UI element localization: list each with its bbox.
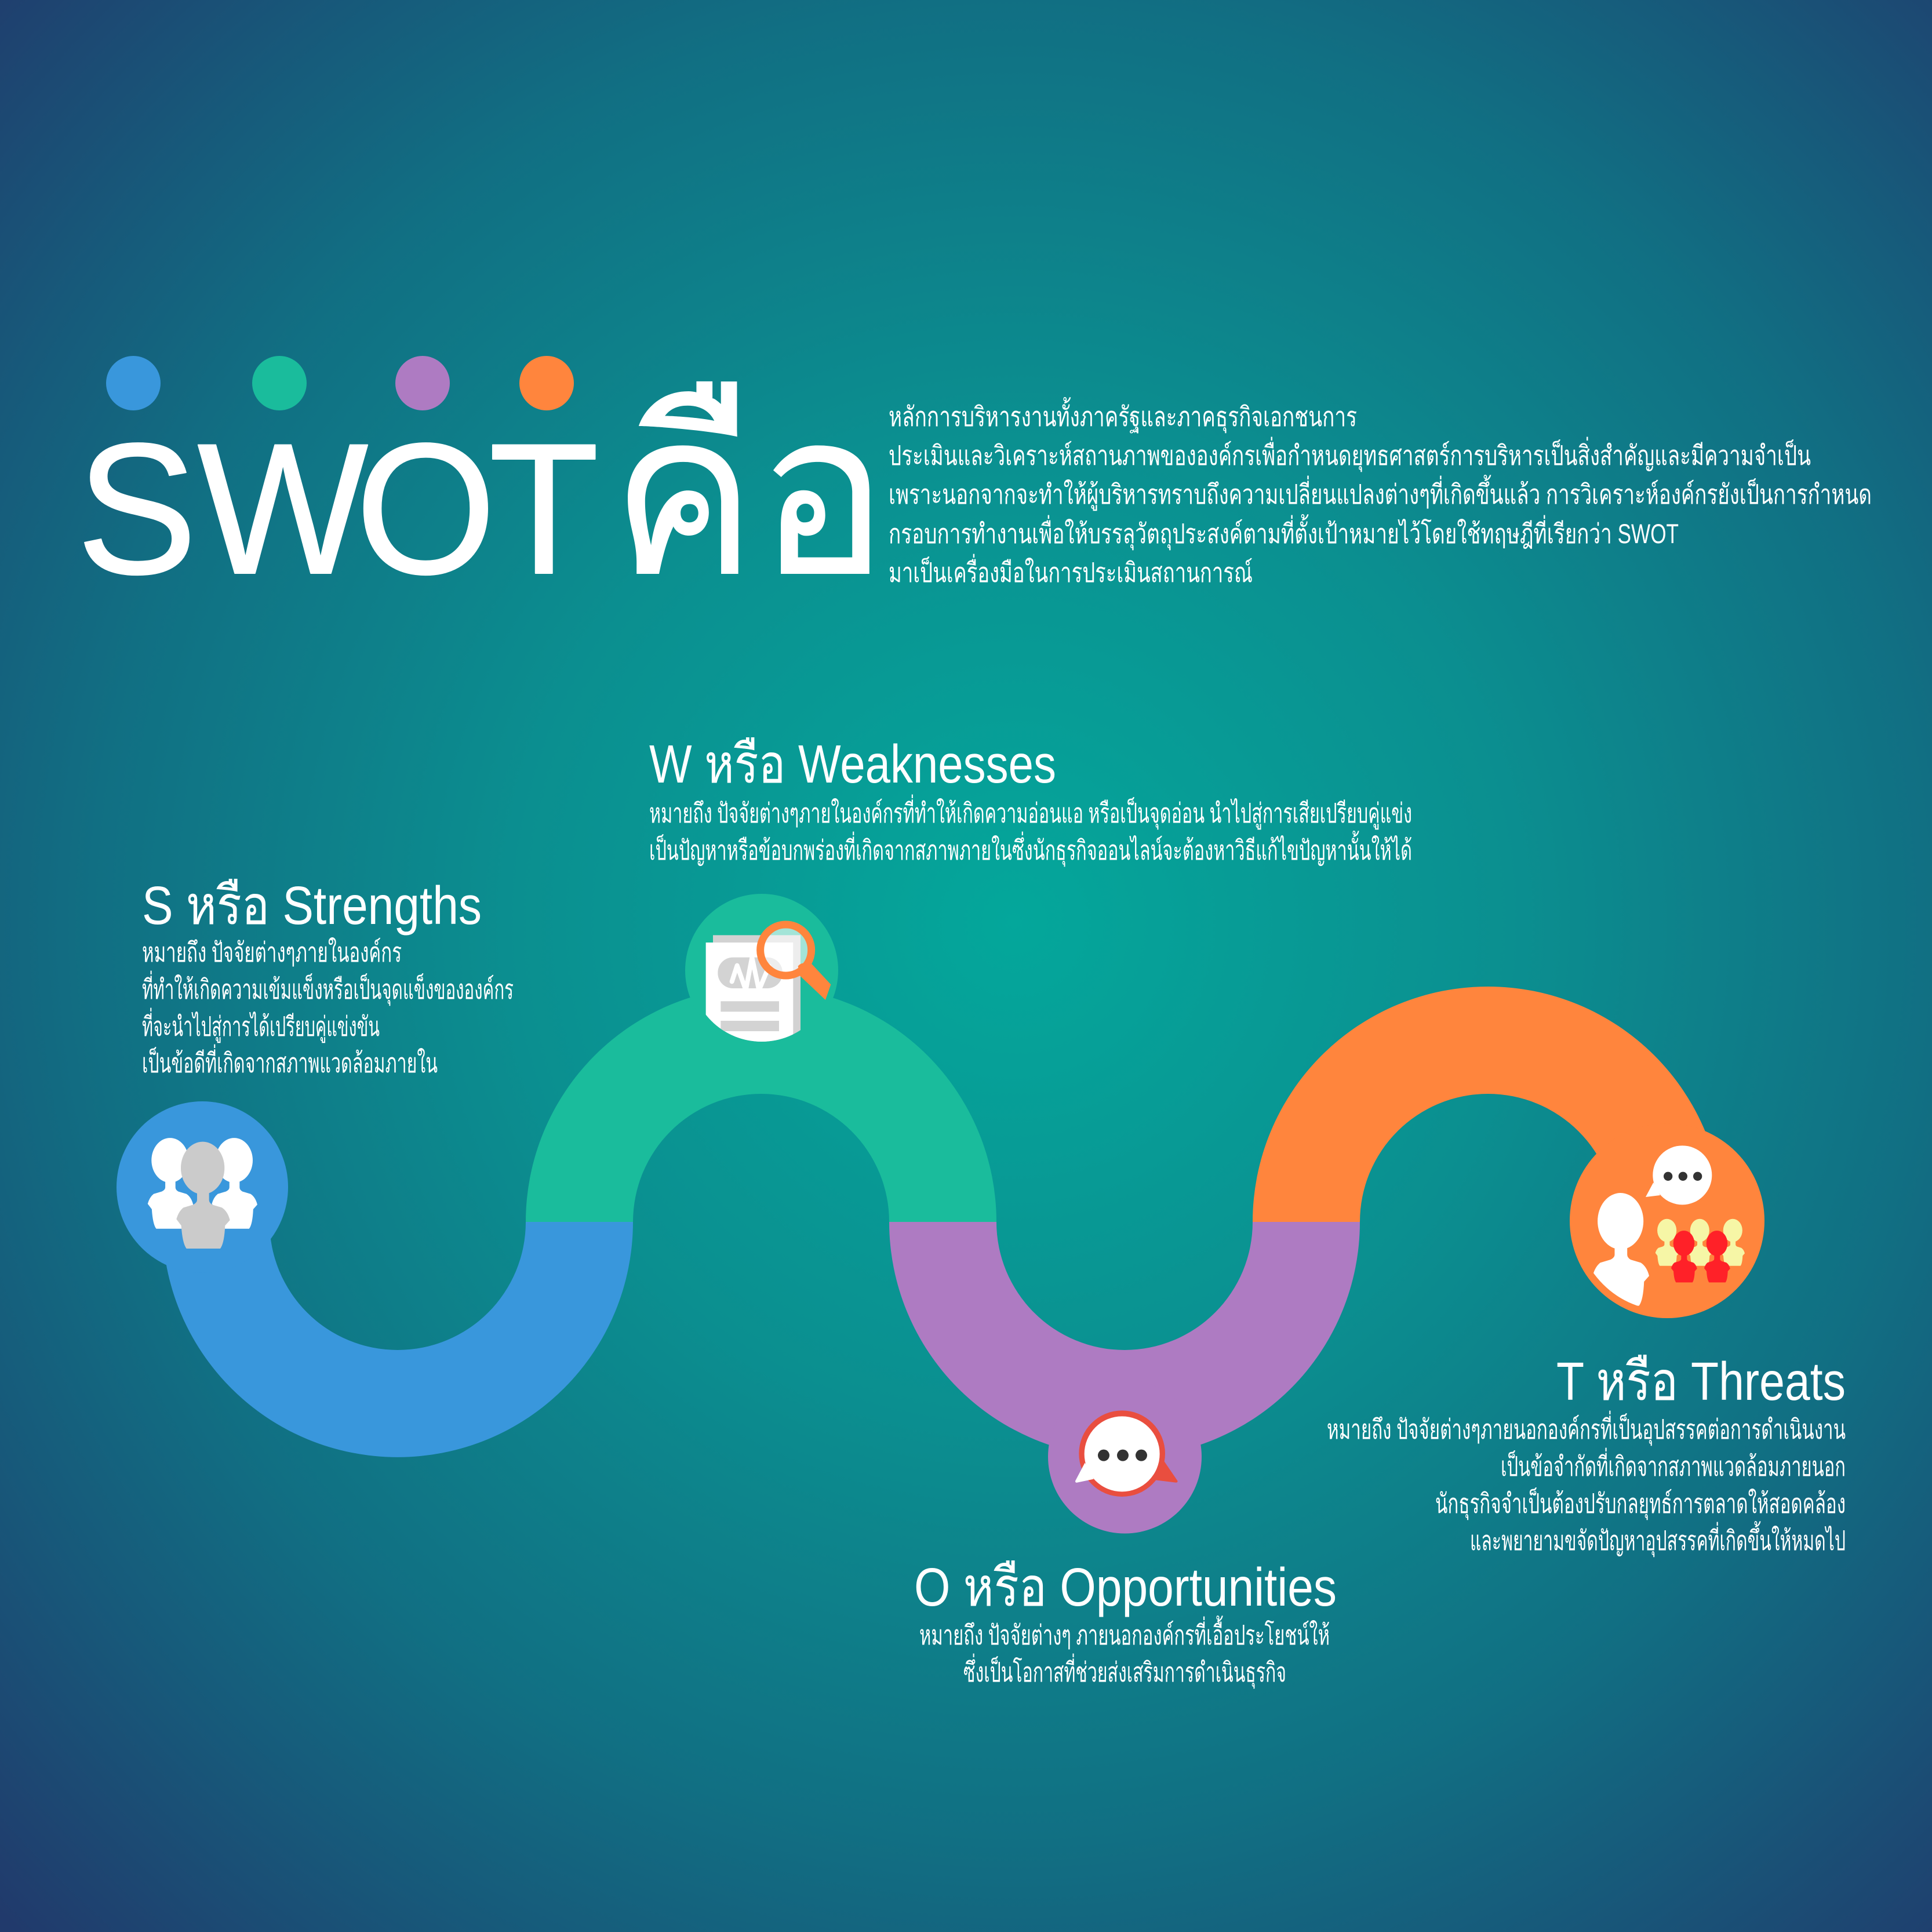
intro text bbox=[889, 397, 1872, 588]
title: SWOT bbox=[77, 405, 599, 613]
text: strengths: เป็นข้อดีที่เกิดจากสภาพแวดล้อมภายใน bbox=[142, 1044, 438, 1078]
text: opportunities: ซึ่งเป็นโอกาสที่ช่วยส่งเสริมการดำเนินธุรกิจ bbox=[963, 1653, 1286, 1689]
icon: threats circle with person, crowd and bubble bbox=[1570, 1123, 1764, 1318]
wave: green arc bbox=[526, 987, 996, 1222]
text: strengths: ที่ทำให้เกิดความเข้มแข็งหรือเป็นจุดแข็งขององค์กร bbox=[142, 970, 514, 1006]
text: opportunities bbox=[919, 1616, 1330, 1689]
heading: strengths: S หรือ Strengths bbox=[142, 875, 482, 936]
wave: purple arc bbox=[889, 1222, 1360, 1457]
wave: blue arc bbox=[162, 1222, 633, 1457]
intro text: กรอบการทำงานเพื่อให้บรรลุวัตถุประสงค์ตามที่ตั้งเป้าหมายไว้โดยใช้ทฤษฎีที่เรียกว่า SWOT bbox=[889, 514, 1679, 551]
text: opportunities: หมายถึง ปัจจัยต่างๆ ภายนอกองค์กรที่เอื้อประโยชน์ให้ bbox=[919, 1616, 1330, 1650]
text: weaknesses: หมายถึง ปัจจัยต่างๆภายในองค์กรที่ทำให้เกิดความอ่อนแอ หรือเป็นจุดอ่อน นำไปสู่การเสียเปรียบคู่แข่ง bbox=[649, 794, 1412, 830]
icon: opportunities circle with speech bubble bbox=[1048, 1380, 1202, 1534]
text: threats bbox=[1327, 1410, 1846, 1558]
icon: strengths circle with people bbox=[117, 1101, 288, 1273]
title bbox=[77, 366, 889, 623]
text: strengths: ที่จะนำไปสู่การได้เปรียบคู่แข่งขัน bbox=[142, 1007, 380, 1043]
title dots bbox=[106, 356, 574, 410]
wave: orange arc bbox=[1253, 987, 1723, 1222]
heading: threats: T หรือ Threats bbox=[1556, 1351, 1846, 1411]
text: weaknesses: เป็นปัญหาหรือข้อบกพร่องที่เกิดจากสภาพภายในซึ่งนักธุรกิจออนไลน์จะต้องหาวิธีแก้ไขปัญหานั้นให้ได้ bbox=[649, 831, 1412, 867]
text: strengths bbox=[142, 937, 514, 1078]
icon: weaknesses circle with document and magnifier bbox=[685, 894, 838, 1047]
intro text: มาเป็นเครื่องมือในการประเมินสถานการณ์ bbox=[889, 554, 1253, 588]
intro text: หลักการบริหารงานทั้งภาครัฐและภาคธุรกิจเอกชนการ bbox=[889, 397, 1357, 434]
text: weaknesses bbox=[649, 794, 1412, 867]
text: strengths: หมายถึง ปัจจัยต่างๆภายในองค์กร bbox=[142, 937, 402, 967]
title: คือ bbox=[610, 366, 889, 623]
heading: weaknesses: W หรือ Weaknesses bbox=[649, 734, 1056, 794]
heading: opportunities: O หรือ Opportunities bbox=[914, 1557, 1337, 1617]
